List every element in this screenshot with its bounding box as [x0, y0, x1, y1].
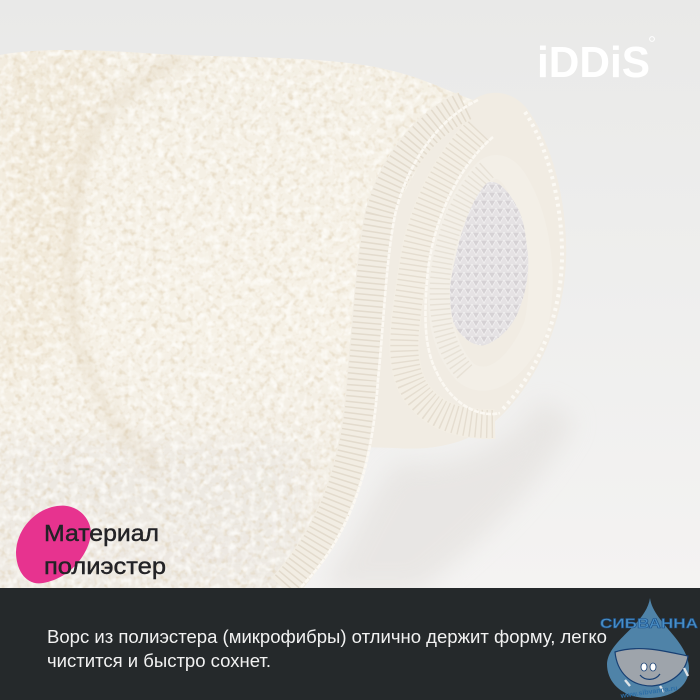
- callout: material: [16, 506, 166, 583]
- material value: полиэстер: [44, 553, 166, 579]
- material heading: Материал: [44, 520, 159, 546]
- warmer side column: [6, 56, 96, 372]
- backing inside the roll: [450, 182, 528, 345]
- shadow under rug: [320, 400, 575, 590]
- description text: [47, 626, 607, 671]
- tub face: [641, 663, 656, 671]
- paler lower left corner: [0, 440, 300, 590]
- watermark name: СИБВАННА: [600, 615, 698, 631]
- pink blob: [16, 506, 91, 583]
- tub feet: [625, 668, 688, 692]
- watermark url: www.sibvanna.ru: [619, 685, 678, 700]
- bathtub: [615, 649, 688, 686]
- watermark: Sibvanna: [600, 598, 698, 700]
- middle rope band: [404, 130, 495, 424]
- outer rope band: [283, 100, 478, 588]
- inner rope band: [440, 167, 541, 379]
- photo: rolled bath mat: [0, 50, 566, 588]
- second stitched line: [425, 137, 500, 414]
- roll body: [360, 93, 566, 449]
- logo: IDDIS: iDDiS: [537, 38, 650, 87]
- water drop: [607, 598, 689, 698]
- mat pile surface: [0, 50, 472, 588]
- description text: чистится и быстро сохнет.: [47, 650, 271, 671]
- description panel: [0, 588, 700, 700]
- description text: Ворс из полиэстера (микрофибры) отлично держит форму, легко: [47, 626, 607, 647]
- right stitched edge: [502, 112, 562, 410]
- tufted channel: [70, 58, 185, 470]
